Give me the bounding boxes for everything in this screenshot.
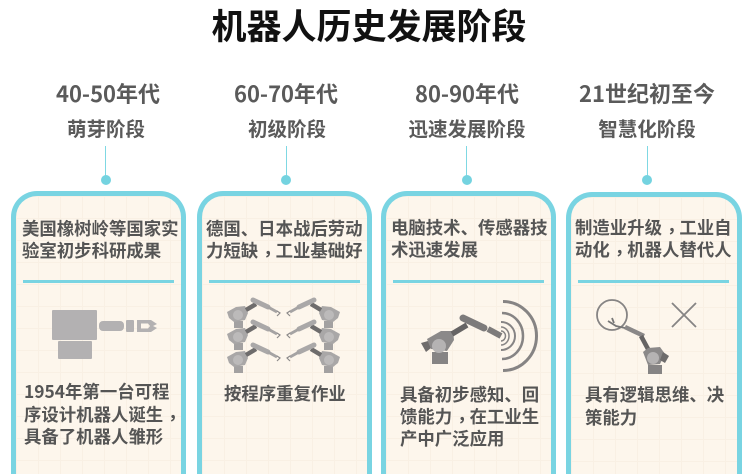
panel 1 background text	[22, 216, 179, 263]
panel 4 background text: 动化 ，机器人替代人	[575, 235, 732, 262]
stage heading: 迅速发展阶段: 迅速发展阶段	[408, 113, 526, 142]
panel 1 background text: 美国橡树岭等国家实	[22, 216, 179, 241]
panel 2 divider	[209, 280, 360, 283]
icon: robot with sensing waves	[421, 302, 536, 370]
panel 4 caption: 具有逻辑思维、决	[585, 382, 724, 407]
connector 1 dot	[101, 175, 111, 185]
panel 4 divider	[578, 280, 729, 283]
panel 3 caption: 馈能力 ，在工业生	[400, 402, 539, 429]
icon: early robot arm	[52, 310, 157, 359]
panel 3 caption	[400, 382, 539, 451]
stage heading: 初级阶段: 初级阶段	[248, 113, 326, 142]
panel 2 background text	[206, 216, 363, 263]
panel 3 background text: 术迅速发展	[391, 237, 478, 262]
panel: 21世纪 card	[566, 192, 742, 474]
title: 机器人历史发展阶段	[211, 0, 526, 50]
panel 1 caption: 1954年第一台可程	[24, 379, 169, 404]
panel: 80-90年代 card	[381, 191, 556, 474]
connector 2 dot	[281, 175, 291, 185]
panel 1 caption: 序设计机器人诞生 ，	[24, 400, 186, 426]
panel 4 caption	[585, 382, 724, 430]
panel 1 caption	[24, 379, 186, 449]
panel 3 caption: 具备初步感知、回	[400, 382, 539, 407]
panel 3 divider	[393, 280, 544, 283]
stage heading: 萌芽阶段: 萌芽阶段	[67, 113, 145, 142]
panel: 60-70年代 card	[197, 191, 372, 474]
panel 4 background text	[575, 213, 732, 262]
connector 3 stem	[466, 146, 467, 180]
connector 1 stem	[105, 146, 106, 180]
panel 4 background text: 制造业升级 ，工业自	[575, 213, 732, 240]
panel: 40-50年代 card	[11, 191, 186, 474]
panel 2 background text: 德国、日本战后劳动	[206, 216, 363, 241]
panel 1 background text: 验室初步科研成果	[22, 238, 161, 263]
connector 2 stem	[286, 146, 287, 180]
panel 3 background text	[391, 215, 548, 262]
connector 3 dot	[462, 175, 472, 185]
panel 2 caption: 按程序重复作业	[224, 381, 346, 406]
panel 4 caption: 策能力	[585, 404, 637, 430]
panel 1 divider	[23, 280, 174, 283]
connector 4 dot	[642, 175, 652, 185]
panel 2 background text: 力短缺 ，工业基础好	[206, 236, 363, 263]
connector 4 stem	[647, 146, 648, 180]
panel 3 caption: 产中广泛应用	[400, 426, 504, 451]
icon: six repeating robots	[227, 300, 340, 373]
icon: robot with circle and cross	[597, 300, 696, 374]
panel 3 background text: 电脑技术、传感器技	[391, 215, 548, 240]
era heading: 21世纪初至今: 21世纪初至今	[579, 77, 715, 109]
era heading: 60-70年代: 60-70年代	[234, 77, 338, 109]
stage heading: 智慧化阶段: 智慧化阶段	[598, 113, 696, 142]
era heading: 40-50年代: 40-50年代	[56, 77, 160, 109]
era heading: 80-90年代: 80-90年代	[415, 77, 519, 109]
panel 1 caption: 具备了机器人雏形	[24, 424, 163, 449]
